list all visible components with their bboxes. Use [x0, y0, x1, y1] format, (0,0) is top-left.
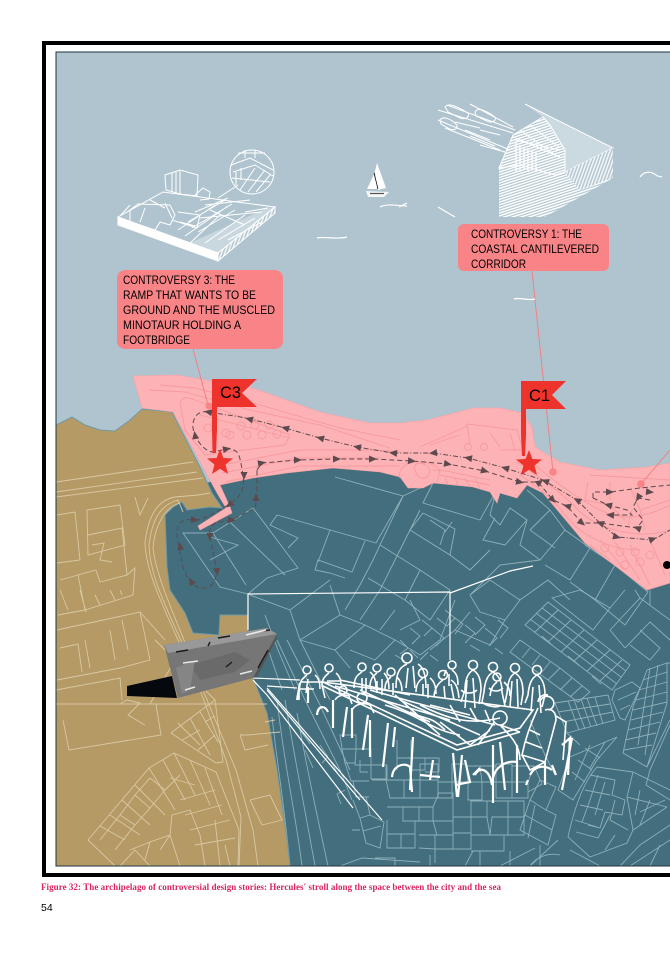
south-central fine blocks — [340, 735, 524, 863]
route arrows — [176, 408, 658, 586]
flag C1: C1 — [529, 386, 550, 405]
callout: controversy 3: GROUND AND THE MUSCLED — [123, 305, 275, 317]
callout: controversy 1: CORRIDOR — [471, 259, 526, 271]
callout: controversy 3: FOOTBRIDGE — [123, 335, 190, 347]
callout: controversy 1 — [458, 224, 609, 271]
caption: Figure 32: The archipelago of controversial design stories: Hercules' stroll along the space between the city and the sea — [41, 882, 502, 892]
star C1 — [516, 450, 542, 475]
callout: controversy 3 — [117, 270, 283, 349]
land street lines — [56, 462, 282, 866]
map outline — [56, 52, 670, 866]
flag C3 — [212, 379, 257, 453]
waves — [317, 172, 662, 300]
table top — [300, 680, 533, 750]
callout: controversy 3: MINOTAUR HOLDING A — [123, 320, 241, 332]
icon: sailboat — [366, 163, 389, 197]
page number: 54 — [41, 902, 53, 914]
star C3 — [207, 449, 233, 474]
sea — [56, 52, 670, 483]
leader dots — [206, 402, 645, 488]
route: dashed stroll paths — [177, 412, 670, 588]
table with seated figures — [297, 653, 572, 803]
black element on promenade — [663, 561, 670, 569]
city blocks ground — [166, 468, 670, 866]
projection lines — [248, 566, 533, 820]
callout: controversy 3: CONTROVERSY 3: THE — [123, 275, 235, 287]
suitcase shadow — [127, 676, 177, 698]
east blocks — [552, 590, 670, 660]
axonometric drawing: cantilevered corridor — [438, 104, 613, 217]
callout: controversy 1: CONTROVERSY 1: THE — [471, 229, 582, 241]
sand-coloured land — [56, 409, 290, 866]
city street lines — [183, 477, 670, 866]
leader lines — [193, 271, 670, 484]
promenade (pink) — [133, 375, 670, 590]
promenade linework — [150, 385, 670, 585]
axonometric drawing: ramp block — [118, 150, 275, 261]
road strip — [265, 640, 420, 866]
callout: controversy 1: COASTAL CANTILEVERED — [471, 244, 599, 256]
callout: controversy 3: RAMP THAT WANTS TO BE — [123, 290, 256, 302]
front row figures — [335, 686, 566, 770]
flag C1 — [521, 381, 566, 456]
suitcase — [164, 628, 277, 698]
back row figures — [299, 653, 545, 713]
table legs and chairs — [297, 683, 572, 803]
map panel — [56, 52, 670, 866]
flag C3: C3 — [220, 383, 241, 402]
